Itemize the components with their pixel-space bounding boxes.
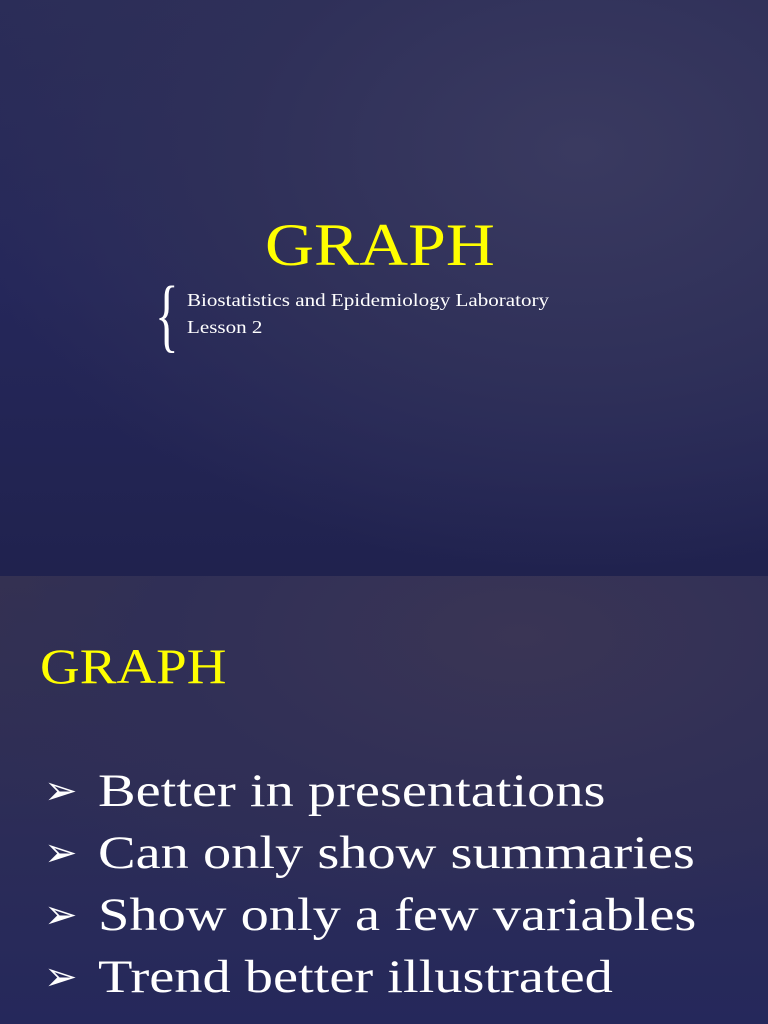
bullet list: ➢ <box>44 768 78 814</box>
panel: content slide <box>0 576 768 1024</box>
bullet list: Better in presentations <box>98 765 605 817</box>
title: GRAPH <box>265 212 495 278</box>
subtitle: Lesson 2 <box>187 317 262 337</box>
subtitle <box>187 290 549 337</box>
bullet list: Show only a few variables <box>98 889 696 941</box>
bullet list: Can only show summaries <box>98 827 695 879</box>
heading: GRAPH <box>40 638 226 694</box>
subtitle: Biostatistics and Epidemiology Laboratory <box>187 290 549 310</box>
icon: brace: { <box>155 269 179 360</box>
bullet list: ➢ <box>44 892 78 938</box>
panel: title slide <box>0 0 768 576</box>
bullet list: ➢ <box>44 954 78 1000</box>
bullet list <box>44 765 696 1003</box>
bullet list: ➢ <box>44 830 78 876</box>
bullet list: Trend better illustrated <box>98 951 613 1003</box>
